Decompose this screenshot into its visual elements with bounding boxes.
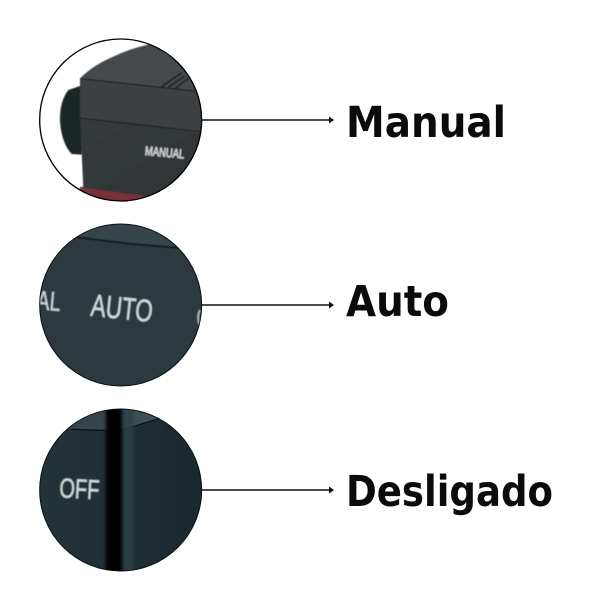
arrow: Manual	[202, 116, 334, 124]
MANUAL legend: MANUAL	[144, 144, 185, 161]
next legend fragment	[198, 310, 200, 324]
AUTO legend: AUTO	[89, 288, 155, 329]
label: Manual: Manual	[346, 98, 506, 148]
upper bevel left	[50, 400, 110, 431]
upper bevel	[78, 224, 176, 248]
top face	[80, 43, 210, 93]
lit ridge beside groove	[122, 400, 134, 580]
lower front panel	[80, 117, 210, 197]
arrow: Auto	[202, 302, 334, 308]
arrow: Off	[202, 486, 334, 494]
circle: Manual switch photo	[39, 38, 202, 202]
dark vertical groove	[106, 393, 122, 587]
upper front panel	[80, 78, 210, 133]
label: Desligado: Desligado	[346, 467, 553, 517]
label: Auto: Auto	[346, 277, 449, 327]
circle: Auto switch photo	[39, 224, 202, 386]
panel seam	[80, 118, 210, 133]
red base	[80, 187, 153, 210]
upper bevel right	[120, 400, 162, 432]
OFF legend: OFF	[59, 472, 100, 505]
AL legend: AL	[35, 285, 62, 317]
knob on the left	[60, 86, 82, 155]
circle: Off switch photo	[39, 408, 202, 572]
vent ridges	[162, 73, 188, 89]
